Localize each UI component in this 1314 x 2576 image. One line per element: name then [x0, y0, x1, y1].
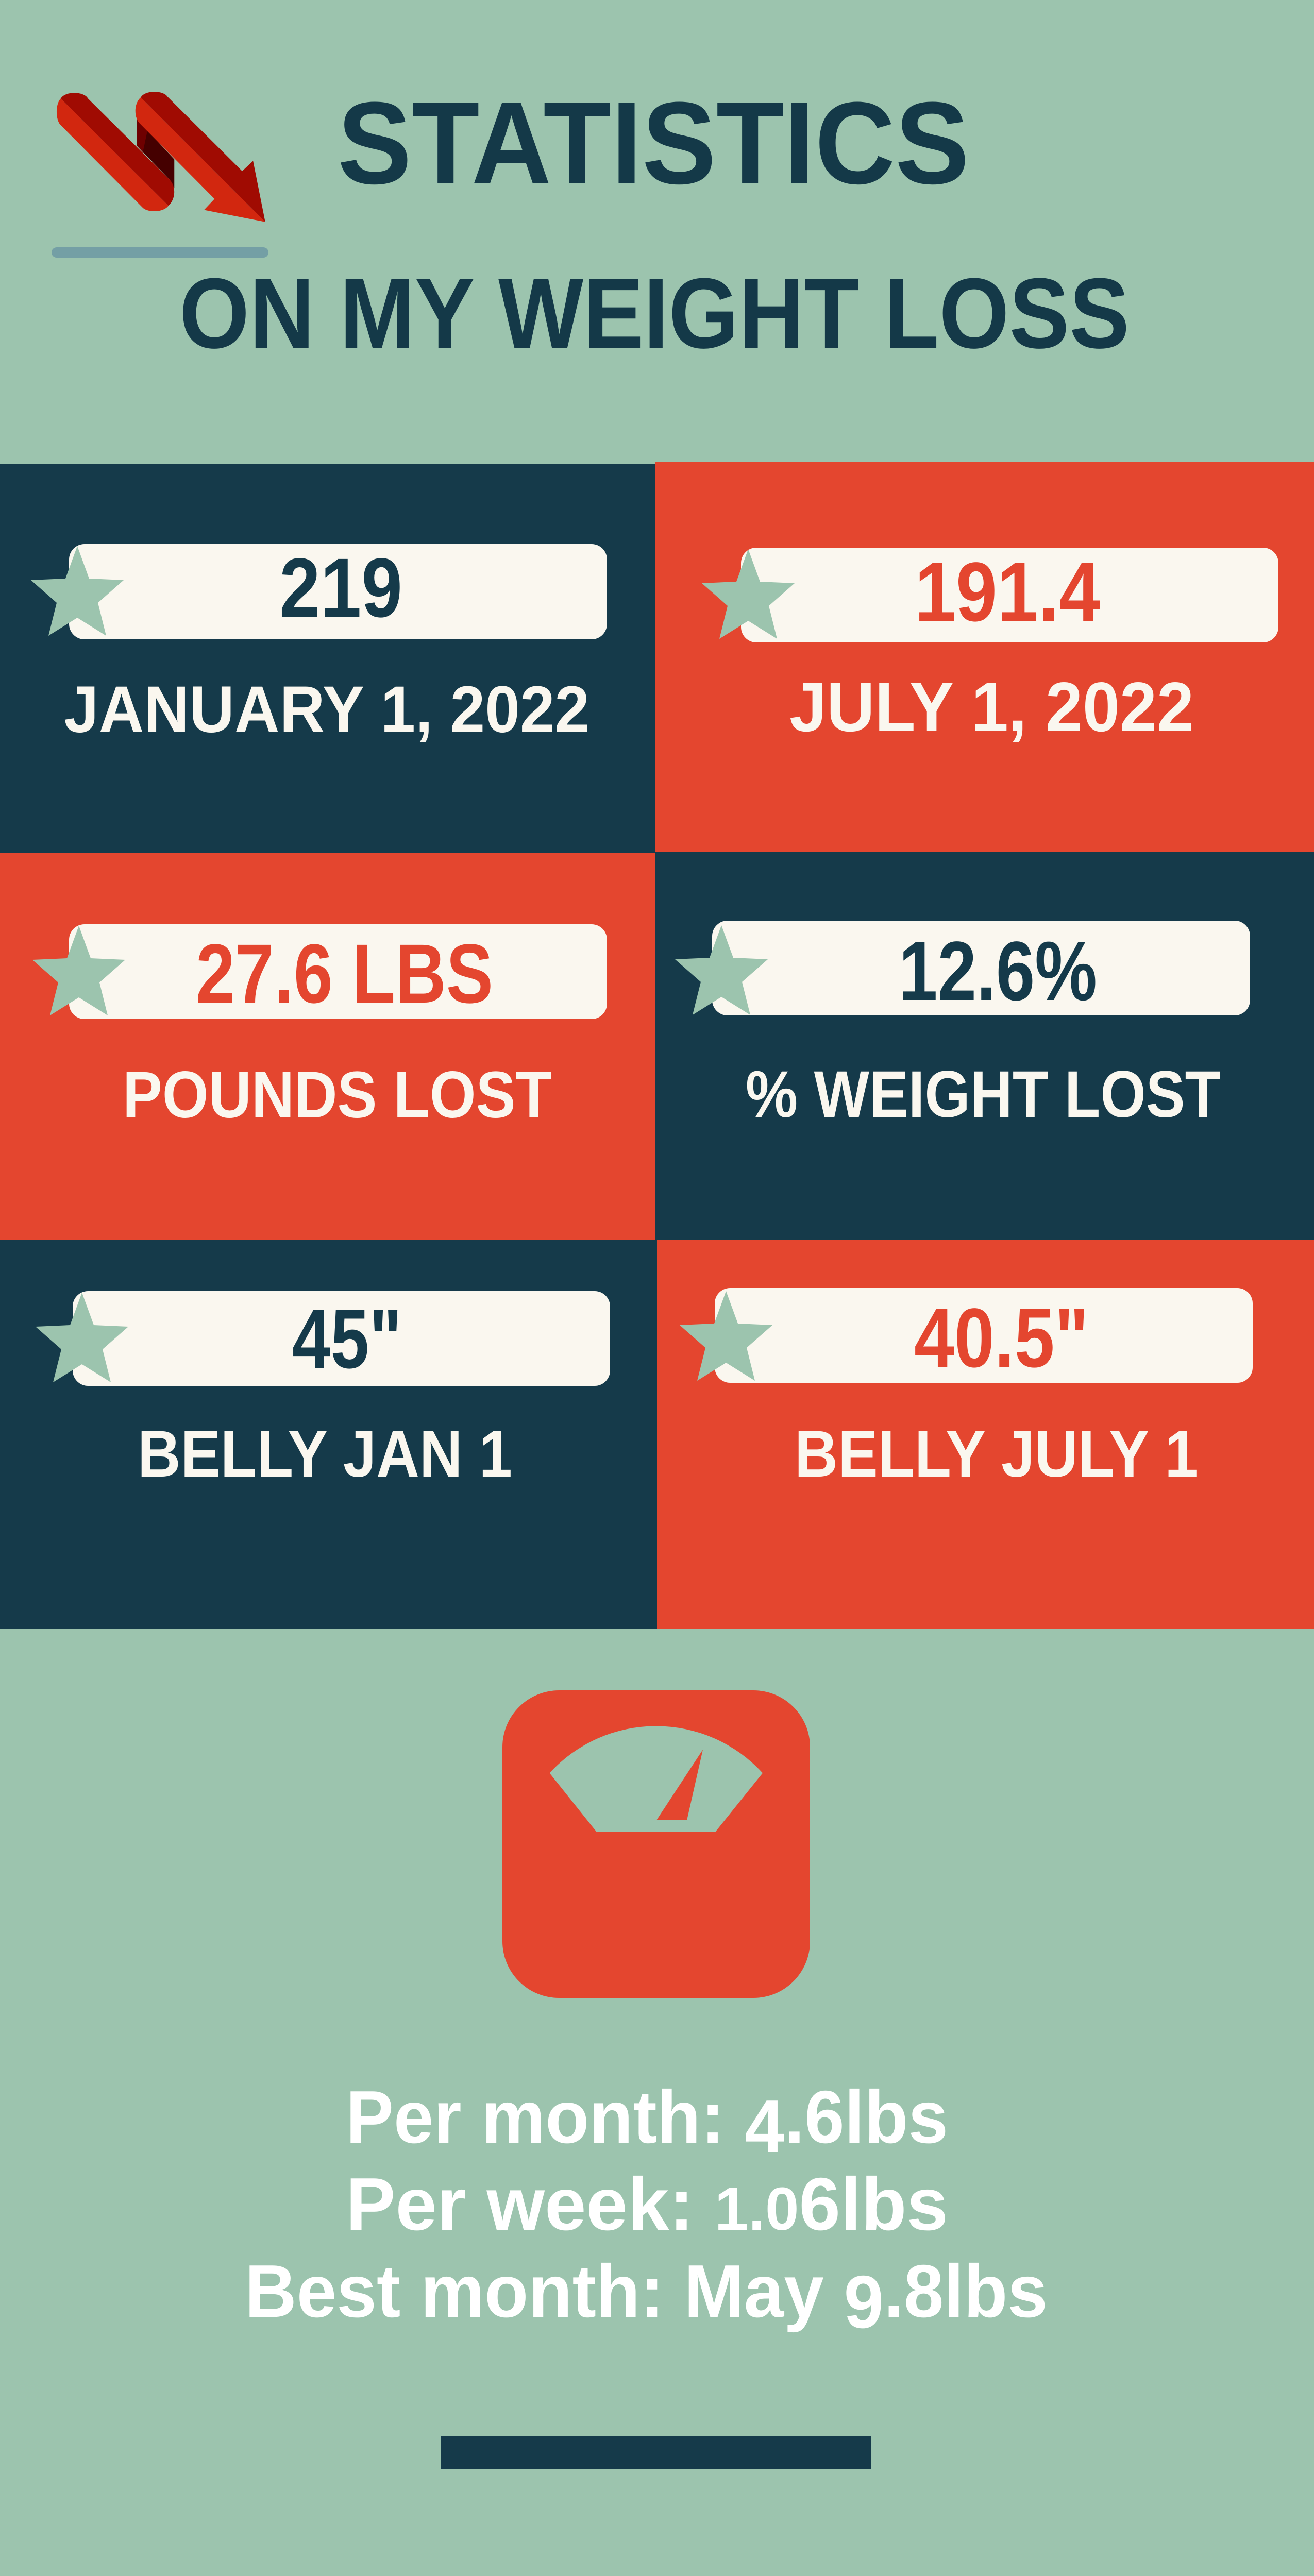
per month: Per month:: [346, 2075, 740, 2159]
icon: star: [36, 1293, 128, 1382]
underline bar: [52, 247, 268, 258]
subtitle: on my weight loss: ON MY WEIGHT LOSS: [179, 258, 1130, 369]
value pill: [715, 1288, 1253, 1383]
value pill: [69, 544, 607, 639]
value pill: [712, 921, 1250, 1015]
best month: .8lbs: [884, 2249, 1048, 2333]
per week: Per week: 1.06lbs: [346, 2162, 948, 2246]
value pill: [741, 548, 1278, 642]
title: statistics: STATISTICS: [338, 78, 969, 209]
value: 219: [279, 540, 402, 635]
summary text: [245, 2075, 1048, 2344]
icon: star: [32, 926, 125, 1015]
header: [52, 78, 1130, 369]
panel: pounds lost: [0, 853, 655, 1240]
icon: star: [31, 546, 124, 636]
panel: belly January: [0, 1240, 657, 1629]
value pill: [69, 924, 607, 1019]
value: 40.5": [914, 1291, 1089, 1385]
footer bar: [441, 2436, 871, 2469]
panel: January 1 weight: [0, 464, 655, 853]
panel: percent weight lost: [655, 852, 1314, 1240]
icon: double downward arrow: [57, 92, 265, 222]
icon: star: [702, 549, 795, 639]
value: 27.6 LBS: [196, 926, 493, 1021]
label: JANUARY 1, 2022: [64, 673, 589, 747]
per month: 4: [745, 2084, 785, 2168]
value: 191.4: [915, 545, 1100, 639]
value: 45": [292, 1292, 402, 1386]
label: POUNDS LOST: [123, 1058, 552, 1132]
value pill: [73, 1291, 610, 1386]
label: BELLY JAN 1: [138, 1417, 512, 1491]
best month: Best month: May: [245, 2249, 847, 2333]
best month: 9: [844, 2260, 884, 2344]
label: JULY 1, 2022: [789, 668, 1194, 746]
per month: .6lbs: [785, 2075, 948, 2159]
label: BELLY JULY 1: [795, 1417, 1198, 1491]
panel: belly July: [657, 1240, 1314, 1629]
icon: star: [675, 925, 768, 1015]
panel: July 1 weight: [655, 462, 1314, 852]
label: % WEIGHT LOST: [746, 1058, 1221, 1131]
icon: bathroom scale: [502, 1690, 810, 1998]
value: 12.6%: [899, 924, 1097, 1018]
icon: star: [680, 1291, 772, 1381]
